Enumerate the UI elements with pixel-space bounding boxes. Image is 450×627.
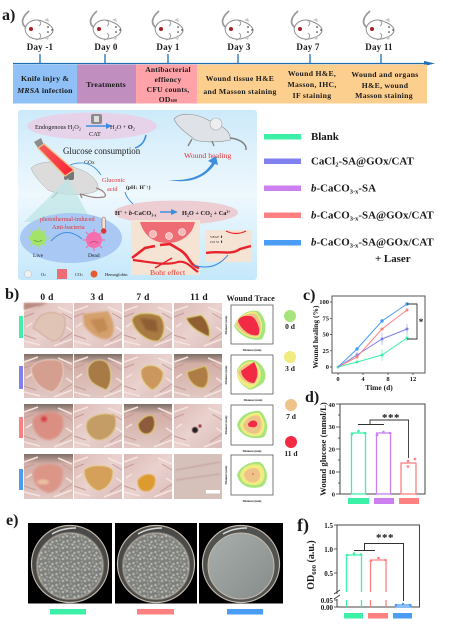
axes: 50 [322, 332, 329, 338]
panel label f: f) [297, 515, 309, 536]
axes: 25 [322, 348, 330, 355]
icon: dead bacterium [83, 229, 105, 251]
axes: Time (d) [365, 383, 393, 392]
arrow: to wound healing [168, 156, 218, 181]
day labels: Day 7 [296, 42, 320, 52]
panel: f) OD600 bar chart [297, 515, 420, 618]
panel: anti-bacteria ellipse: photothermal-induced [40, 216, 96, 223]
legend: trace days [284, 310, 298, 458]
photo row: laser [24, 454, 222, 499]
legend: treatment groups: b-CaCO [311, 182, 350, 194]
axes: 8 [386, 376, 390, 383]
trace chart: CaCl2: Distance (mm) [224, 366, 228, 384]
day labels: Day 1 [156, 42, 180, 52]
axes: 30 [328, 424, 335, 431]
trace chart: laser [224, 455, 273, 503]
column headings: 11 d [190, 293, 208, 303]
legend: treatment groups: CaCl [311, 156, 335, 168]
bar: laser [395, 603, 411, 607]
schematic legend [24, 269, 128, 279]
day labels: Day 3 [227, 42, 251, 52]
column headings [40, 293, 208, 303]
icon: mouse day 7 [292, 11, 322, 40]
label: pH change: + [144, 184, 146, 188]
axes: OD [306, 575, 317, 590]
bar: b-CaCO3 GOx [370, 557, 387, 607]
column headings: 0 d [40, 293, 54, 303]
label: gluconic acid: acid [107, 186, 118, 193]
stage box: antibacterial: effiency [155, 75, 181, 84]
panel: CO2 reaction ellipse: + Ca [212, 210, 227, 217]
illustration: healed mouse [174, 114, 246, 150]
schematic legend: O2 [41, 272, 46, 277]
label: pH change: ↑) [146, 184, 151, 191]
photo row: blank [24, 303, 222, 348]
legend: treatment groups: -SA@GOx/CAT [338, 156, 414, 168]
axes [318, 402, 425, 498]
panel: d) wound glucose bar chart [305, 389, 425, 504]
stage box: infection [13, 64, 77, 104]
axes: 0 [336, 376, 340, 383]
axes: 20 [328, 446, 335, 454]
stage box: antibacterial [136, 64, 197, 104]
top reaction ellipse: 2 [79, 126, 81, 132]
arrow: acid to reaction [125, 192, 137, 207]
panel label b: b) [5, 286, 19, 303]
legend: treatment groups: + Laser [375, 253, 411, 265]
icon: mouse day 3 [222, 11, 253, 40]
significance bracket: * [419, 317, 424, 327]
panel: wound trace charts [224, 294, 298, 503]
light cone [24, 178, 92, 222]
axes: 0.05 [321, 597, 334, 605]
label: GOx: GOx [84, 160, 95, 166]
significance bracket: *** [376, 532, 394, 544]
schematic legend: Hemoglobin [105, 272, 128, 277]
icon: mouse day 1 [152, 11, 183, 40]
stage box: later analyses [197, 64, 427, 104]
legend: trace days: 11 d [284, 449, 298, 458]
stage box: later analyses: Masson staining [355, 91, 413, 100]
legend: trace days: 3 d [285, 364, 296, 373]
stage box: later analyses: and Masson staining [203, 87, 277, 96]
axes: 4 [361, 376, 365, 383]
icon: thermometer [101, 217, 106, 234]
legend: treatment groups: Blank [311, 131, 340, 143]
stage box: treatments: Treatments [86, 80, 126, 89]
top reaction ellipse: CAT [89, 131, 101, 138]
panel label a: a) [2, 7, 15, 24]
bar: blank [351, 430, 366, 494]
panel: CO2 reaction ellipse: 2 [187, 212, 189, 218]
panel: c) wound healing line chart [303, 287, 425, 392]
panel: CO2 reaction ellipse: 2+ [226, 210, 230, 214]
stage box: later analyses: Masson, IHC, [287, 80, 337, 89]
legend: treatment groups: b-CaCO [311, 236, 350, 248]
photo row: CaCl2 [24, 354, 222, 398]
illustration: angiogenesis inset: CD 31 ⬆ [210, 239, 223, 244]
label: Bohr effect: Bohr effect [150, 268, 186, 277]
trace chart: CaCl2 [224, 355, 273, 402]
stage box: later analyses: Wound H&E, [288, 69, 336, 78]
trace chart: b-CaCO3 GOx [224, 405, 273, 453]
plate: laser [199, 523, 283, 604]
day labels: Day 0 [94, 42, 118, 52]
panel: anti-bacteria ellipse: Dead [88, 253, 100, 259]
icon: mouse day 11 [364, 11, 394, 40]
stage box: infection: Knife injry & [21, 74, 69, 83]
group colour bars [348, 498, 419, 504]
axes: 0 [326, 364, 329, 371]
label: gluconic acid [102, 177, 125, 193]
stage box: later analyses: Wound and organs [351, 70, 419, 79]
column headings: 7 d [136, 293, 150, 303]
axes: 0.5 [324, 570, 334, 578]
legend: treatment groups: 2 [335, 162, 338, 168]
panel: a) experiment timeline [2, 7, 435, 104]
axes: Wound healing (%) [311, 305, 320, 368]
axes: 0.00 [321, 604, 334, 612]
label: gluconic acid: Gluconic [102, 177, 125, 184]
panel: e) bacterial plates [6, 512, 283, 614]
arrow: glucose to gluconic acid [70, 163, 101, 175]
legend: treatment groups: 3-x [350, 216, 359, 222]
bar: b-CaCO3 GOx [401, 458, 416, 494]
top reaction ellipse [27, 112, 157, 140]
legend: treatment groups: 3-x [350, 242, 359, 250]
panel: CO2 reaction ellipse: 3-x [151, 214, 156, 218]
trace chart: blank [224, 305, 273, 352]
trace chart: laser: Distance (mm) [243, 499, 261, 503]
timeline arrow [13, 54, 435, 66]
top reaction ellipse: O [74, 124, 79, 131]
trace chart: laser: Distance (mm) [224, 466, 228, 484]
photo row: b-CaCO3 GOx [24, 404, 222, 448]
panel: CO2 reaction ellipse [114, 200, 238, 224]
group colour bars [344, 613, 412, 618]
heading: glucose consumption: Glucose consumption [63, 146, 141, 156]
panel: CO2 reaction ellipse: b-CaCO [129, 210, 151, 217]
trace chart: blank: Distance (mm) [243, 348, 261, 352]
trace chart: blank: Distance (mm) [224, 316, 228, 334]
legend: treatment groups: -SA [358, 182, 376, 194]
axes: 10 [328, 469, 335, 476]
plate: b-CaCO3 GOx [115, 523, 197, 604]
top reaction ellipse: O + [117, 124, 128, 131]
stage box: infection: MRSA infection [16, 86, 73, 95]
axes: 75 [322, 316, 330, 322]
legend: trace days: 7 d [286, 412, 297, 421]
legend: treatment groups [264, 131, 434, 265]
top reaction ellipse: H [110, 124, 115, 131]
panel: CO2 reaction ellipse: 2 [210, 212, 212, 218]
illustration: angiogenesis inset [206, 230, 252, 262]
stage box: antibacterial: Antibacterial [145, 65, 191, 74]
series: laser [338, 303, 408, 367]
panel: b) wound photographs [5, 286, 222, 499]
stage box: later analyses: H&E, wound [362, 81, 409, 90]
panel: CO2 reaction ellipse: + [122, 210, 129, 217]
column headings: 3 d [90, 293, 104, 303]
day labels: Day 11 [365, 42, 393, 52]
axes: (a.u.) [306, 540, 317, 565]
stage box: antibacterial: CFU counts, [147, 85, 189, 94]
series: blank [337, 334, 408, 368]
stage box: antibacterial: OD600 [159, 95, 177, 104]
series: b-CaCO3 GOx [338, 309, 408, 367]
group colour bars [19, 316, 23, 490]
trace chart: b-CaCO3 GOx: Distance (mm) [224, 416, 228, 434]
laser beam [34, 138, 74, 176]
schematic legend: CO2 [75, 272, 83, 277]
stage box: later analyses: Wound tissue H&E [206, 74, 274, 83]
bar: blank [346, 552, 362, 607]
illustration: treated mouse [31, 162, 105, 198]
trace chart: CaCl2: Distance (mm) [244, 398, 262, 402]
panel label e: e) [6, 512, 18, 529]
legend: treatment groups: b-CaCO [311, 210, 350, 222]
top reaction ellipse: O [128, 124, 133, 131]
label: wound healing: Wound healing [184, 151, 231, 160]
label: pH change: (pH↓ H [126, 185, 144, 191]
legend: trace days: 0 d [285, 322, 296, 331]
day labels [27, 42, 393, 52]
plate: blank [28, 523, 112, 604]
panel: mechanism schematic [18, 110, 257, 280]
panel: CO2 reaction ellipse: H [182, 210, 187, 217]
axes: 1.0 [324, 546, 334, 554]
panel: anti-bacteria ellipse: Anti-bacteria [52, 224, 85, 231]
scale bar [206, 490, 220, 494]
trace chart: b-CaCO3 GOx: Distance (mm) [243, 449, 261, 453]
axes: 40 [328, 402, 335, 409]
axes: 100 [319, 299, 329, 306]
top reaction ellipse: 2 [133, 126, 135, 132]
arrow: to inset [194, 255, 228, 267]
axes: Wound glucose (mmol/L) [318, 402, 328, 496]
axes: 12 [410, 376, 416, 383]
top reaction ellipse: Endogenous H [35, 124, 72, 131]
illustration: angiogenesis inset: VEGF ⬆ [210, 234, 223, 239]
panel label d: d) [305, 389, 319, 406]
panel: CO2 reaction ellipse: + [120, 209, 123, 214]
stage box: treatments [77, 64, 136, 104]
icon: mouse day 0 [90, 11, 121, 40]
legend: treatment groups: -SA@GOx/CAT [358, 236, 434, 248]
arrow: oxygen to glucose [135, 135, 146, 148]
stage box: later analyses: IF staining [293, 91, 331, 100]
panel label c: c) [303, 287, 315, 304]
panel: anti-bacteria ellipse [20, 213, 122, 263]
illustration: Bohr effect tissue [131, 220, 200, 275]
icon: mouse day -1 [22, 11, 53, 40]
panel: anti-bacteria ellipse: Live [33, 253, 44, 259]
top reaction ellipse: 2 [72, 126, 74, 132]
axes: 0 [332, 492, 335, 498]
axes: 600 [311, 565, 318, 575]
group colour bars [50, 609, 263, 614]
top reaction ellipse: 2 [115, 126, 117, 132]
heading: wound trace: Wound Trace [226, 294, 275, 303]
axes: 1.5 [324, 522, 334, 530]
arrow: live to dead [51, 232, 82, 241]
icon: live bacterium [27, 227, 49, 249]
panel: CO2 reaction ellipse: O + CO [189, 210, 210, 217]
axes [311, 296, 425, 392]
day labels: Day -1 [27, 42, 54, 52]
legend: treatment groups: -SA@GOx/CAT [358, 210, 434, 222]
legend: treatment groups: 3-x [350, 188, 359, 196]
panel: CO2 reaction ellipse: H [115, 210, 120, 217]
series: CaCl2 [338, 324, 408, 367]
significance bracket: *** [382, 412, 400, 424]
bar: b-CaCO3 SA [376, 431, 391, 494]
axes [306, 522, 420, 612]
